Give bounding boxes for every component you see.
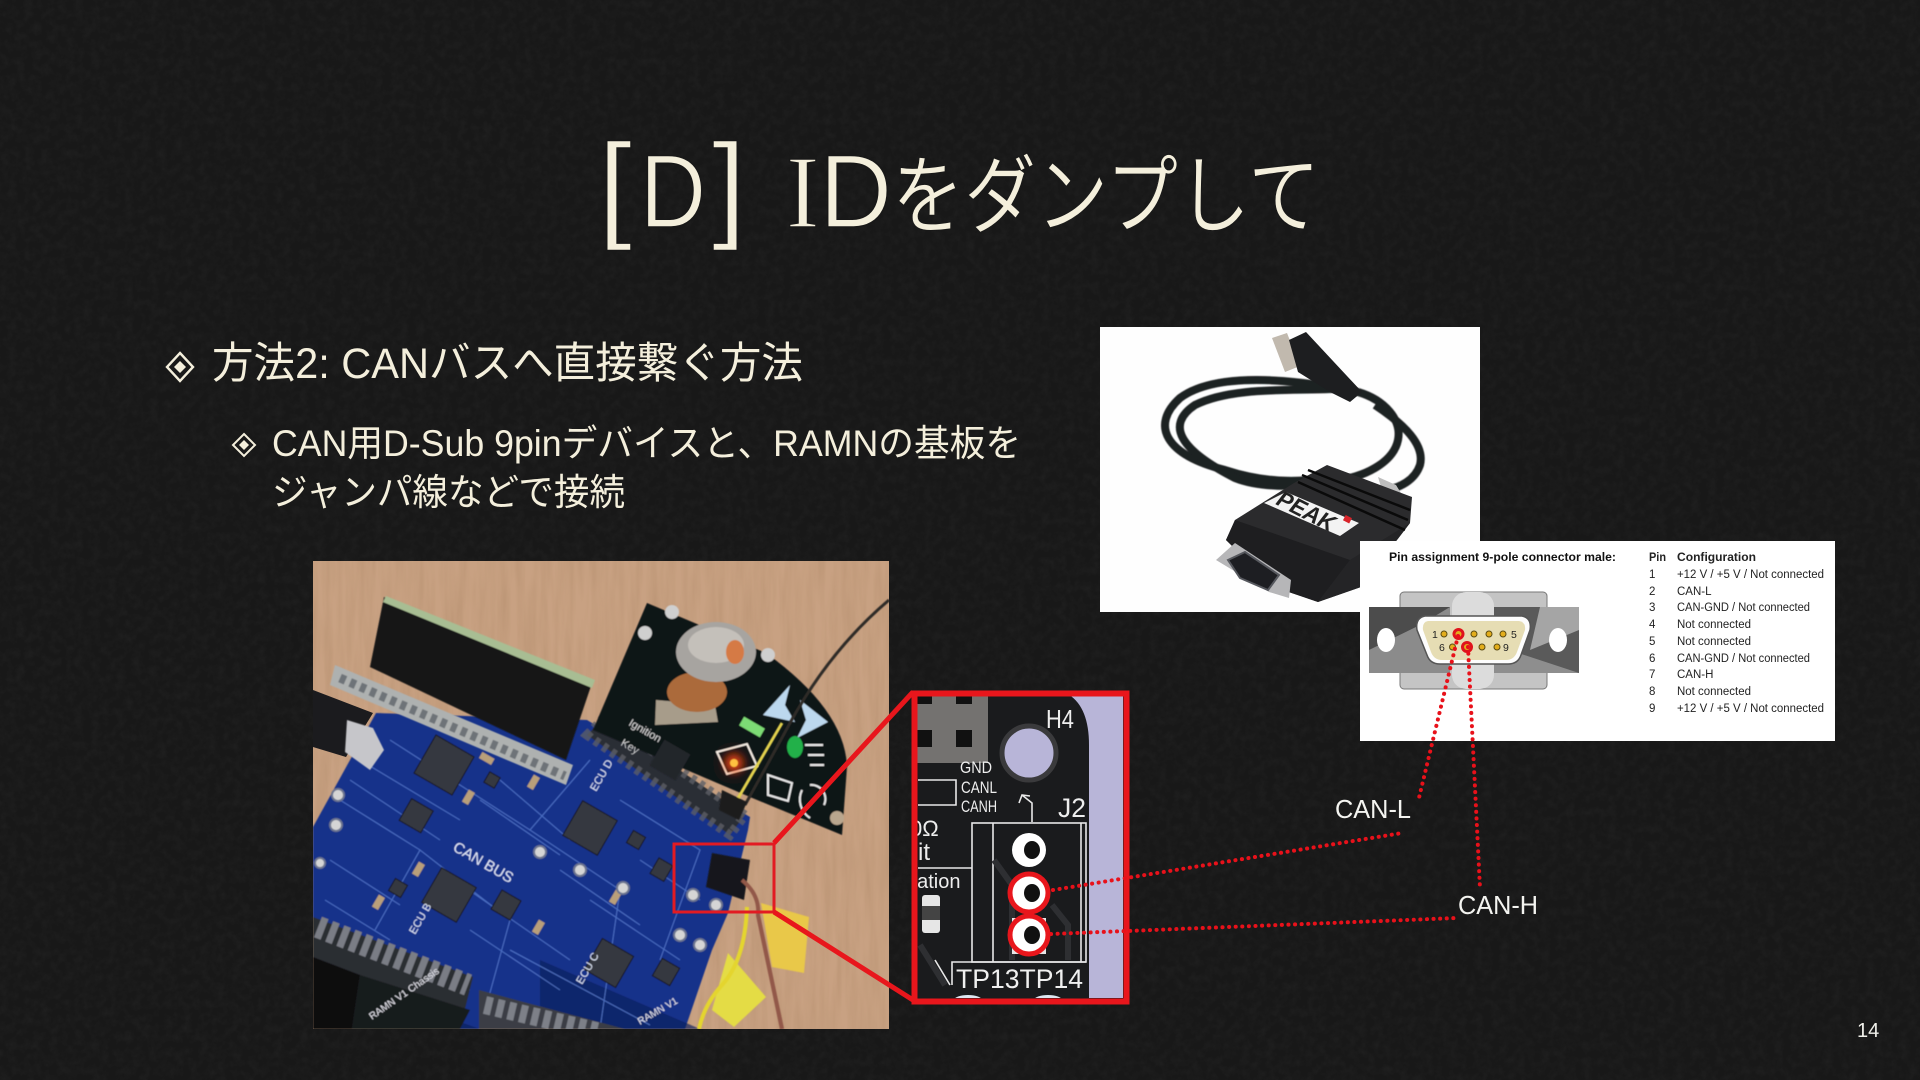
- dotted connection lines: [1051, 636, 1480, 934]
- bullet list: [167, 340, 1021, 513]
- page number: 14: [1857, 1020, 1879, 1042]
- silk text: Key: [618, 737, 641, 757]
- pin table: CAN-H: [1677, 669, 1713, 681]
- table heading: Pin assignment 9-pole connector male:: [1389, 552, 1616, 564]
- silk labels: J2: [1058, 793, 1086, 823]
- title: bracket open: [: [598, 120, 632, 252]
- label: CAN-L: CAN-L: [1335, 794, 1411, 824]
- pin table: [1649, 552, 1824, 715]
- label: CAN-H: CAN-H: [1458, 890, 1538, 920]
- pin table: CAN-GND / Not connected: [1677, 653, 1810, 665]
- USB plug: [1272, 332, 1362, 402]
- cable loops: [1165, 380, 1421, 490]
- pin table: 9: [1649, 703, 1655, 715]
- pin table: 7: [1649, 669, 1655, 681]
- silk labels: nation: [906, 871, 960, 893]
- bullet icon: level 1 diamond: [167, 353, 193, 381]
- photo: PEAK USB-CAN adapter: [1100, 327, 1480, 612]
- title: ID: ID: [786, 134, 892, 250]
- RAMN V1 chassis labels: RAMN V1 Chassis: [367, 966, 442, 1022]
- silk labels: [918, 710, 1085, 888]
- photo: RAMN board on wooden desk: [313, 561, 889, 1032]
- bullet icon: level 2 diamond: [233, 434, 255, 456]
- pin table: Pin: [1649, 552, 1666, 564]
- pin table: 8: [1649, 686, 1655, 698]
- inset red frame: [914, 694, 1126, 1002]
- pin table: +12 V / +5 V / Not connected: [1677, 703, 1824, 715]
- pin table: 6: [1649, 653, 1655, 665]
- pin table: Not connected: [1677, 619, 1751, 631]
- label TP13 TP14: TP13TP14: [956, 964, 1083, 994]
- pin table: CAN-L: [1677, 586, 1712, 598]
- ignition key: [655, 622, 756, 725]
- RAMN V1 chassis labels: RAMN V1: [636, 996, 680, 1028]
- pin table: Not connected: [1677, 636, 1751, 648]
- silk text: Ignition: [626, 717, 663, 745]
- magnifier lines from photo to inset: [774, 692, 913, 1000]
- board silk labels: CAN BUS: [450, 839, 516, 887]
- silk labels: GND: [960, 758, 992, 777]
- inset: zoomed PCB layout with TP13 and TP14: [906, 693, 1127, 1005]
- text: level 1: 方法2: CANバスへ直接繋ぐ方法: [212, 340, 803, 388]
- inset content: [918, 696, 1123, 998]
- pin table: 3: [1649, 602, 1655, 614]
- header footprint: [914, 693, 988, 763]
- pin table: +12 V / +5 V / Not connected: [1677, 569, 1824, 581]
- white background: [1100, 327, 1480, 612]
- mounting hole H4: [1002, 726, 1056, 780]
- jumper wires, connector and tape: [699, 600, 889, 1029]
- silk labels: H4: [1046, 704, 1074, 734]
- silk labels: CANL: [961, 778, 997, 797]
- LCD module: black display with pin header: [330, 596, 595, 785]
- arrows: [763, 685, 795, 722]
- text: level 2 first line: CAN用D-Sub 9pinデバイスと、RAMNの基板を: [272, 423, 1021, 464]
- pin table: 4: [1649, 619, 1656, 631]
- wood desk: [313, 561, 889, 1029]
- pin table: Configuration: [1677, 552, 1756, 564]
- mounting holes: [315, 789, 722, 951]
- D-sub 9 connector diagram: [1369, 592, 1579, 689]
- D-sub 9 connector diagram: 1: [1432, 629, 1438, 641]
- board silk labels: ECU C: [574, 951, 602, 986]
- silk labels: 0Ω: [910, 816, 939, 841]
- pin table: Not connected: [1677, 686, 1751, 698]
- USB cable black plug: [313, 690, 373, 757]
- PEAK label: PEAK: [1273, 485, 1341, 537]
- component: [922, 895, 940, 933]
- silk labels: it: [918, 839, 930, 866]
- D-sub connector: [1216, 543, 1291, 598]
- board silk labels: [407, 758, 616, 986]
- highlight rectangle on photo: [674, 844, 774, 912]
- adapter body: [1226, 465, 1412, 602]
- connector outline J2: [918, 780, 1086, 962]
- pads: J2 pins: [1012, 833, 1046, 952]
- panel: pin assignment table: [1360, 541, 1835, 741]
- title: D: D: [640, 134, 706, 250]
- chips: [388, 735, 680, 988]
- pin table: 1: [1649, 569, 1655, 581]
- pin table: 2: [1649, 586, 1655, 598]
- blue RAMN PCB: [313, 713, 750, 1032]
- title: japanese text: をダンプして: [892, 149, 1320, 245]
- silk text: [620, 718, 662, 756]
- D-sub 9 connector diagram: 6: [1439, 642, 1445, 654]
- silk labels: CANH: [961, 797, 997, 816]
- D-sub 9 connector diagram: 9: [1503, 642, 1509, 654]
- title: bracket close: ]: [712, 120, 746, 252]
- PCB traces: [920, 860, 1068, 985]
- board silk labels: ECU B: [407, 901, 434, 936]
- black semicircular daughter board: [593, 603, 847, 835]
- strain relief: [1378, 477, 1404, 500]
- red circles on CAN pins: [1010, 874, 1048, 954]
- text: level 2 second line: ジャンパ線などで接続: [272, 472, 625, 513]
- small components: [372, 752, 622, 935]
- panel background: [1360, 541, 1835, 741]
- board edge and purple background: [1072, 696, 1123, 998]
- pin table: CAN-GND / Not connected: [1677, 602, 1810, 614]
- board silk labels: ECU D: [588, 758, 616, 794]
- title: [598, 120, 1320, 252]
- pin headers: [587, 718, 745, 835]
- pin table: 5: [1649, 636, 1655, 648]
- LEDs: [787, 736, 803, 758]
- D-sub 9 connector diagram: 5: [1511, 629, 1517, 641]
- RAMN V1 chassis labels: [367, 966, 680, 1028]
